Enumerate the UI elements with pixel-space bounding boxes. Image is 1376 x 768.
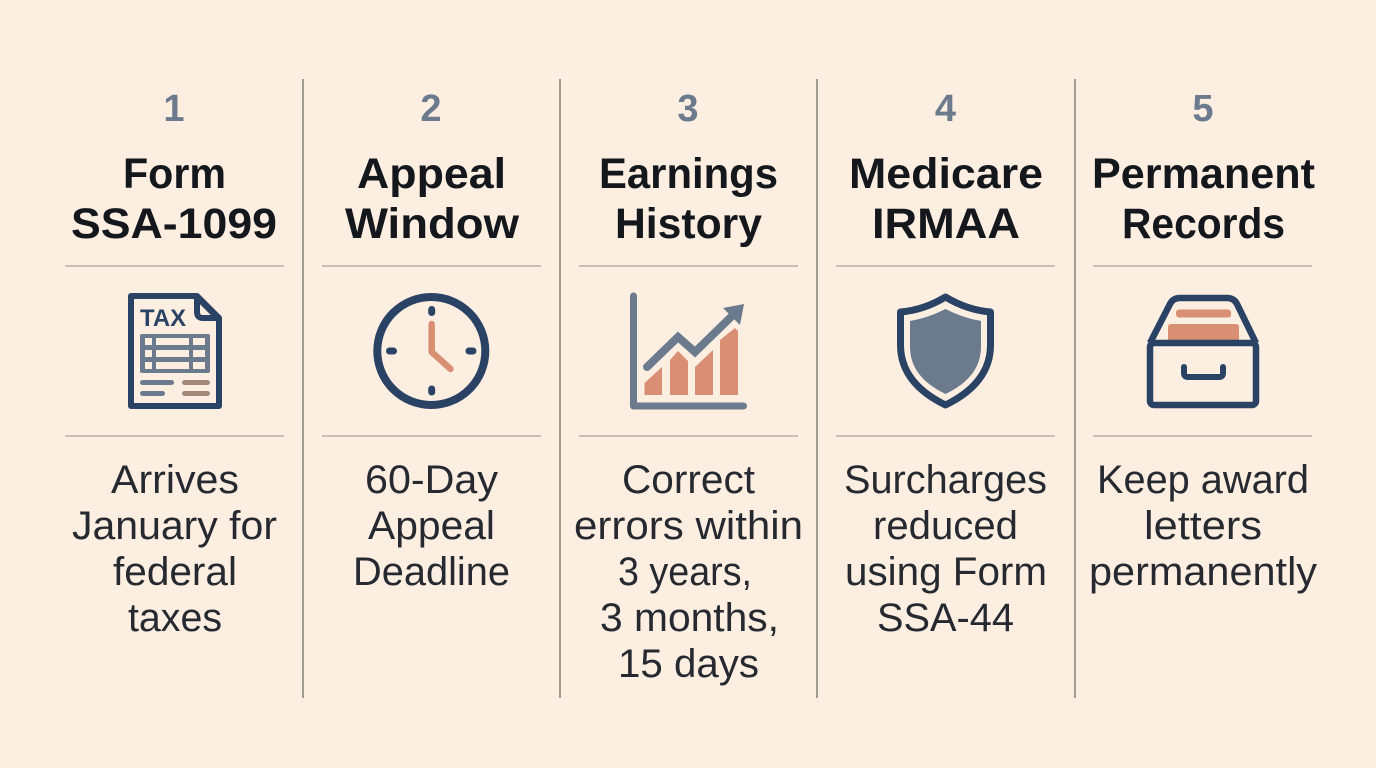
heading: Medicare IRMAA — [849, 150, 1043, 248]
heading: Form SSA-1099 — [71, 150, 277, 248]
heading: Medicare IRMAA: IRMAA — [872, 200, 1020, 248]
text: Keep award letters permanently: Keep award — [1097, 458, 1309, 502]
text: Arrives January for federal taxes: federal — [113, 550, 237, 594]
text: Correct errors within 3 years, 3 months, 15 days: Correct — [622, 458, 755, 502]
heading: Permanent Records — [1092, 150, 1315, 248]
icon: archive drawer — [1150, 298, 1256, 405]
heading: Permanent Records: Permanent — [1092, 150, 1315, 198]
heading: Permanent Records: Records — [1122, 200, 1285, 248]
panel: Appeal Window — [345, 88, 520, 594]
text: Correct errors within 3 years, 3 months, 15 days: 15 days — [618, 642, 759, 686]
icon: shield — [900, 297, 990, 405]
text: Arrives January for federal taxes — [72, 458, 277, 640]
text: Arrives January for federal taxes: Arrives — [111, 458, 239, 502]
text: Arrives January for federal taxes: taxes — [128, 596, 222, 640]
text: Keep award letters permanently — [1089, 458, 1317, 594]
heading: Earnings History — [599, 150, 778, 248]
icon: clock — [377, 297, 485, 405]
text: Surcharges reduced using Form SSA-44: SSA-44 — [877, 596, 1014, 640]
text: Surcharges reduced using Form SSA-44: Surcharges — [844, 458, 1047, 502]
heading: Appeal Window — [345, 150, 520, 248]
number 3: 3 — [677, 88, 699, 130]
text: 60-Day Appeal Deadline: Deadline — [353, 550, 510, 594]
text: Surcharges reduced using Form SSA-44: reduced — [873, 504, 1018, 548]
heading: Appeal Window: Appeal — [357, 150, 506, 198]
text: Correct errors within 3 years, 3 months, 15 days: 3 years, — [618, 550, 752, 594]
number 5: 5 — [1192, 88, 1214, 130]
text: Surcharges reduced using Form SSA-44: using Form — [845, 550, 1047, 594]
text: Correct errors within 3 years, 3 months, 15 days: 3 months, — [600, 596, 779, 640]
text: Arrives January for federal taxes: January for — [72, 504, 277, 548]
text: Correct errors within 3 years, 3 months, 15 days — [574, 458, 803, 686]
heading: Form SSA-1099: SSA-1099 — [71, 200, 277, 248]
heading: Earnings History: History — [615, 200, 762, 248]
heading: Earnings History: Earnings — [599, 150, 778, 198]
text: Surcharges reduced using Form SSA-44 — [844, 458, 1047, 640]
panel: Form SSA-1099 — [71, 88, 277, 640]
number 4: 4 — [935, 88, 956, 130]
heading: Medicare IRMAA: Medicare — [849, 150, 1043, 198]
number 1: 1 — [163, 88, 185, 130]
panel: Medicare IRMAA — [844, 88, 1047, 640]
text: 60-Day Appeal Deadline: 60-Day — [365, 458, 498, 502]
text: 60-Day Appeal Deadline — [353, 458, 510, 594]
heading: Form SSA-1099: Form — [123, 150, 226, 198]
icon: tax form document: TAX — [140, 305, 186, 332]
text: Keep award letters permanently: letters — [1144, 504, 1262, 548]
text: Keep award letters permanently: permanently — [1089, 550, 1317, 594]
panel: Earnings History — [574, 88, 803, 686]
icon: tax form document — [131, 296, 219, 406]
text: 60-Day Appeal Deadline: Appeal — [368, 504, 495, 548]
heading: Appeal Window: Window — [345, 200, 520, 248]
panel: Permanent Records — [1089, 88, 1317, 594]
number 2: 2 — [420, 88, 442, 130]
icon: rising bar chart — [634, 296, 744, 406]
text: Correct errors within 3 years, 3 months, 15 days: errors within — [574, 504, 803, 548]
